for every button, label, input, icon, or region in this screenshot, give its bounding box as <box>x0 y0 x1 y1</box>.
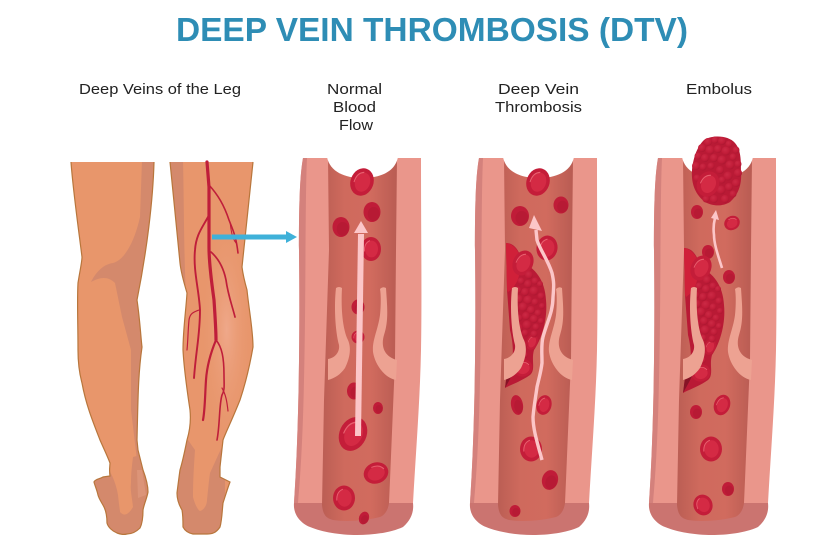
wall clot <box>683 248 724 393</box>
leg: back view with veins <box>168 160 253 540</box>
label: normal blood flow: Normal <box>327 82 382 98</box>
label: deep vein thrombosis <box>495 82 582 116</box>
label: normal blood flow: Blood <box>333 100 376 116</box>
flow arrow <box>529 215 554 460</box>
clot <box>505 243 546 388</box>
veins <box>187 162 238 440</box>
leg: back view without veins <box>71 160 160 540</box>
panel: embolus <box>649 136 776 535</box>
label: deep veins of the leg: Deep Veins of the Leg <box>79 82 241 98</box>
label: normal blood flow <box>327 82 382 134</box>
blood cells <box>690 205 742 518</box>
flow arrow <box>711 210 722 268</box>
embolus clot <box>692 136 742 205</box>
blood cells <box>509 165 568 517</box>
infographic <box>70 17 776 535</box>
flow arrow <box>354 221 368 436</box>
label: normal blood flow: Flow <box>339 118 374 134</box>
title: DEEP VEIN THROMBOSIS (DTV) <box>176 11 688 48</box>
panel: normal blood flow <box>294 157 421 535</box>
arrow: leg to vessel <box>212 231 297 243</box>
label: deep vein thrombosis: Deep Vein <box>498 82 579 98</box>
label: deep vein thrombosis: Thrombosis <box>495 100 582 116</box>
label: embolus: Embolus <box>686 82 752 98</box>
panel: deep vein thrombosis <box>470 157 597 535</box>
blood cells <box>332 165 391 526</box>
